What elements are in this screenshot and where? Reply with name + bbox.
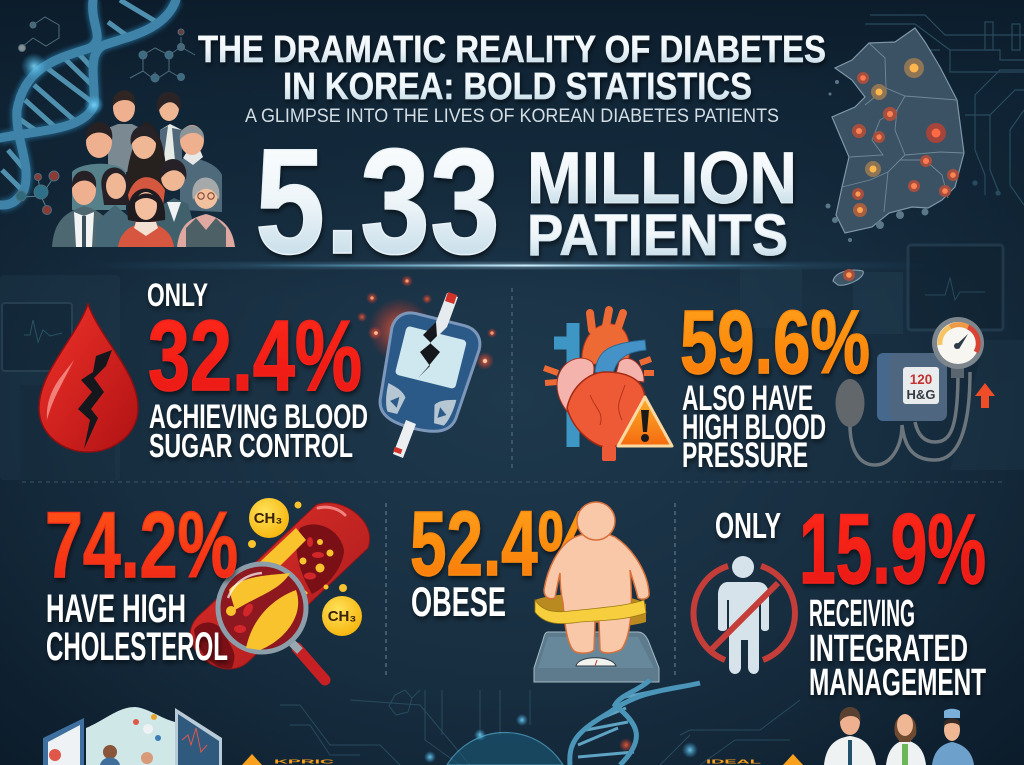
heart icon — [544, 310, 672, 461]
blood pressure monitor icon: 120 — [910, 372, 932, 387]
person: right grey man — [180, 125, 222, 212]
body — [544, 532, 649, 653]
person: right woman in jacket — [150, 159, 198, 247]
blood pressure caption: ALSO HAVE — [682, 379, 813, 418]
faint medical equipment right — [740, 245, 1024, 470]
sparks around meter — [357, 275, 497, 370]
side vessels — [544, 359, 654, 383]
medical team illustration — [824, 707, 974, 765]
person: back right woman — [157, 92, 182, 172]
blood pressure caption: HIGH BLOOD — [682, 408, 826, 447]
title: THE DRAMATIC REALITY OF DIABETES — [198, 29, 826, 71]
stat 59.6%: 59.6% — [680, 293, 870, 393]
cholesterol molecule bubbles: CH₃ — [254, 510, 282, 527]
ONLY label: ONLY — [147, 277, 208, 313]
KPRIC label — [242, 754, 334, 765]
blood pressure monitor icon — [836, 317, 995, 465]
aortic arch — [582, 324, 629, 365]
person: back left man — [108, 90, 140, 172]
blood pressure monitor icon: H&G — [907, 387, 935, 402]
Jeju island — [833, 269, 863, 285]
map hotspots — [852, 58, 959, 217]
cholesterol caption — [46, 587, 228, 669]
glowing divider — [80, 263, 940, 268]
right atrium — [615, 358, 644, 382]
divider right — [674, 503, 676, 675]
molecule icons top left — [16, 17, 195, 214]
ventricles — [567, 372, 645, 448]
no-care icon — [693, 556, 795, 674]
headline unit — [527, 138, 797, 268]
blood drop icon — [39, 304, 138, 452]
glucose meter icon — [370, 292, 484, 458]
scale — [534, 632, 659, 682]
vertical divider — [511, 288, 513, 470]
pulmonary artery — [595, 340, 646, 378]
circuit lines top right — [865, 15, 1024, 205]
divider left — [385, 503, 387, 675]
faint medical equipment left — [0, 275, 120, 480]
title: IN KOREA: BOLD STATISTICS — [283, 66, 752, 108]
cholesterol caption: CHOLESTEROL — [46, 625, 228, 669]
blood sugar caption: ACHIEVING BLOOD — [149, 398, 368, 436]
person: left man — [72, 122, 126, 210]
cholesterol molecule bubbles — [248, 498, 362, 636]
ONLY label: ONLY — [715, 505, 781, 546]
title — [198, 29, 826, 108]
integrated management caption: RECEIVING — [809, 593, 915, 635]
bottom circuit and particle lines — [280, 690, 800, 765]
person: elderly woman — [177, 178, 235, 247]
person: front second woman — [96, 168, 135, 247]
subtitle: A GLIMPSE INTO THE LIVES OF KOREAN DIABETES PATIENTS — [245, 105, 779, 127]
person: front center woman — [118, 188, 174, 247]
horizontal divider — [22, 481, 1002, 483]
headline unit: PATIENTS — [527, 203, 788, 268]
IDEAL label — [706, 754, 803, 765]
integrated management caption — [809, 593, 986, 704]
cholesterol caption: HAVE HIGH — [46, 587, 186, 631]
blood sugar caption: SUGAR CONTROL — [149, 427, 353, 464]
headline unit: MILLION — [527, 138, 797, 219]
bottom left care illustration — [43, 707, 222, 765]
blood sugar caption — [149, 398, 368, 464]
tape front — [535, 600, 646, 624]
up arrow — [975, 383, 995, 408]
headline number: 5.33 — [255, 117, 500, 285]
DNA helix top left — [0, 0, 176, 205]
obese caption: OBESE — [411, 578, 506, 625]
person: center woman in red — [126, 122, 166, 230]
blood vessel illustration — [190, 498, 370, 680]
magnifying glass — [218, 564, 325, 680]
left atrium — [557, 358, 594, 418]
stat 74.2%: 74.2% — [45, 492, 238, 597]
blood pressure caption — [682, 379, 826, 475]
blood pressure caption: PRESSURE — [682, 436, 808, 475]
group of Korean patients — [52, 90, 235, 247]
stat 52.4%: 52.4% — [410, 493, 596, 595]
person: front left man — [52, 171, 116, 247]
cholesterol molecule bubbles: CH₃ — [328, 608, 356, 625]
warning triangle — [618, 397, 672, 446]
stat 32.4%: 32.4% — [148, 300, 362, 412]
vena cava — [554, 323, 573, 447]
bottom glowing DNA — [424, 680, 700, 765]
obese figure on scale — [534, 502, 659, 682]
map of South Korea — [826, 28, 964, 285]
tape back — [535, 594, 646, 626]
head — [577, 502, 615, 540]
